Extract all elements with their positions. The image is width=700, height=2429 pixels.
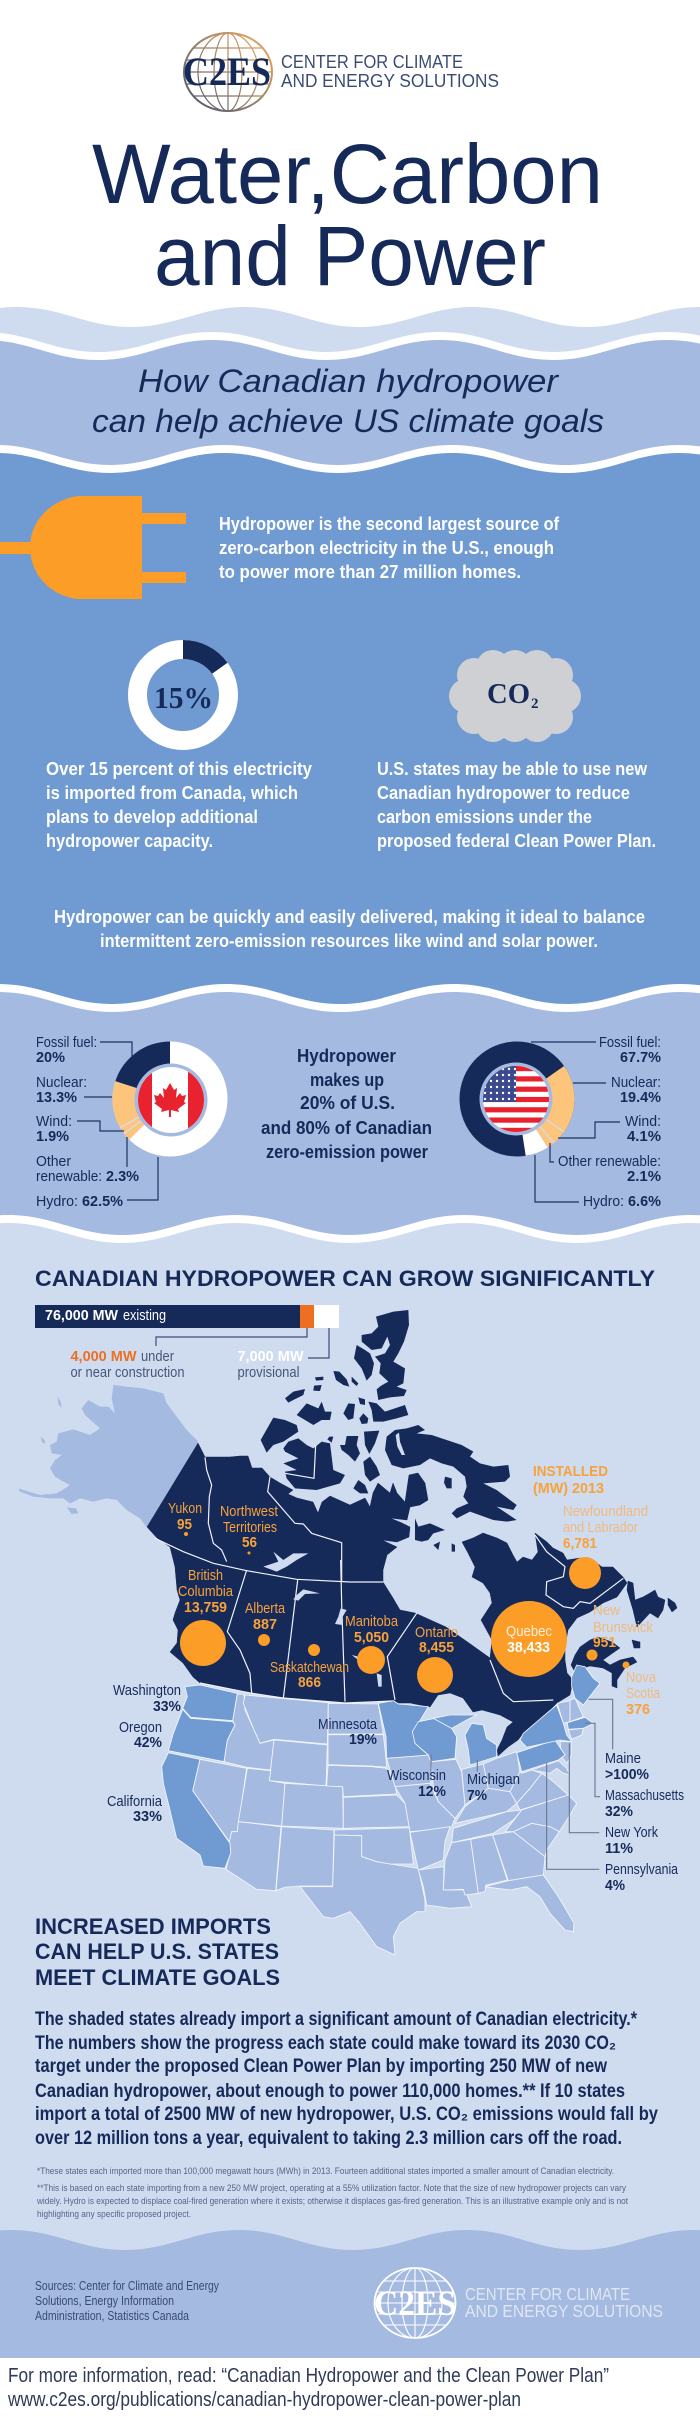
- text: clean power plan: [377, 759, 656, 851]
- label: Quebec: Quebec: [506, 1624, 552, 1640]
- subtitle: How Canadian hydropower: [138, 363, 559, 399]
- label: Newfoundland and Labrador: [563, 1504, 648, 1552]
- label: Maine: >100%: [605, 1767, 649, 1783]
- text: shaded states paragraph: [35, 2009, 658, 2149]
- text: more information: For more information, read: “Canadian Hydropower and the Clean Power Plan”: [8, 2365, 609, 2387]
- label: Yukon: 95: [177, 1517, 192, 1533]
- label: Pennsylvania: [605, 1862, 679, 1894]
- text: 15 percent imported: hydropower capacity.: [46, 831, 213, 851]
- label: Northwest Territories: [220, 1504, 278, 1551]
- label: installed heading: [533, 1463, 608, 1497]
- label: provisional: provisional: [238, 1364, 300, 1381]
- label: Nova Scotia: Nova: [626, 1670, 657, 1686]
- labels: Canada generation mix: Hydro:: [36, 1194, 78, 1210]
- text: clean power plan: U.S. states may be able to use new: [377, 759, 648, 779]
- title: Water,Carbon: [92, 127, 603, 221]
- text: hydropower share: and 80% of Canadian: [261, 1118, 432, 1138]
- text: footnotes: highlighting any specific proposed project.: [37, 2209, 191, 2220]
- label: New York: [605, 1825, 659, 1857]
- label: Ontario: [415, 1625, 458, 1656]
- logo name: CENTER FOR CLIMATE: [281, 52, 463, 72]
- heading: increased imports: [35, 1914, 280, 1990]
- label: Wisconsin: 12%: [418, 1784, 446, 1800]
- label: Quebec: 38,433: [507, 1640, 550, 1656]
- text: hydropower second largest source: to power more than 27 million homes.: [219, 562, 521, 582]
- label: Quebec: [506, 1624, 552, 1656]
- heading: increased imports: INCREASED IMPORTS: [35, 1914, 271, 1939]
- text: 15 percent imported: plans to develop additional: [46, 807, 258, 827]
- labels: US generation mix: 6.6%: [628, 1194, 661, 1210]
- text: clean power plan: carbon emissions under the: [377, 807, 592, 827]
- map: provincial borders and lakes: [155, 1445, 623, 1703]
- text: sources: Administration, Statistics Canada: [35, 2308, 190, 2323]
- icon: CO2 cloud: CO: [487, 679, 530, 710]
- labels: US generation mix: [531, 1035, 661, 1210]
- label: Massachusetts: 32%: [605, 1804, 633, 1820]
- map: US western states: [162, 1685, 425, 1955]
- label: Northwest Territories: Northwest: [220, 1504, 278, 1520]
- label: Nova Scotia: [626, 1670, 661, 1718]
- label: Manitoba: 5,050: [354, 1630, 389, 1646]
- label: Wisconsin: [387, 1768, 446, 1800]
- labels: Canada generation mix: 13.3%: [36, 1090, 77, 1106]
- label: Northwest Territories: 56: [242, 1535, 257, 1551]
- labels: Canada generation mix: Wind:: [36, 1114, 72, 1130]
- label: Saskatchewan: Saskatchewan: [270, 1660, 349, 1676]
- label: Minnesota: [318, 1717, 378, 1748]
- label: Pennsylvania: Pennsylvania: [605, 1862, 679, 1878]
- text: hydropower share: 20% of U.S.: [300, 1093, 395, 1113]
- text: footnotes: [36, 2166, 628, 2220]
- label: Northwest Territories: Territories: [223, 1520, 277, 1536]
- label: Newfoundland and Labrador: Newfoundland: [563, 1504, 648, 1520]
- label: New Brunswick: 951: [593, 1635, 616, 1651]
- label: British Columbia: 13,759: [184, 1600, 227, 1616]
- text: footnotes: **This is based on each state importing from a new 250 MW project, operating at a 55% utilization factor. Note that the size of new hydropower projects can vary: [37, 2183, 626, 2194]
- label: Newfoundland and Labrador: and Labrador: [563, 1520, 638, 1536]
- text: hydropower share: [261, 1046, 432, 1162]
- heading: Canadian hydropower can grow: CANADIAN HYDROPOWER CAN GROW SIGNIFICANTLY: [35, 1266, 655, 1291]
- logo name: AND ENERGY SOLUTIONS: [465, 2301, 663, 2321]
- footer logo: [374, 2268, 663, 2338]
- text: hydropower second largest source: Hydropower is the second largest source of: [219, 514, 560, 534]
- subtitle: [92, 363, 604, 439]
- label: Minnesota: 19%: [349, 1732, 377, 1748]
- logo name: AND ENERGY SOLUTIONS: [281, 71, 499, 91]
- label: Michigan: Michigan: [467, 1772, 520, 1788]
- label: British Columbia: Columbia: [178, 1584, 234, 1600]
- map: state labels: [107, 1683, 684, 1894]
- chart: US generation mix donut: [460, 1042, 575, 1156]
- label: provisional: [238, 1348, 304, 1381]
- text: clean power plan: proposed federal Clean Power Plan.: [377, 831, 656, 851]
- chart: 15 percent donut: 15%: [154, 680, 213, 715]
- label: California: [107, 1794, 163, 1825]
- chart: capacity stacked bar: existing: [123, 1307, 166, 1324]
- chart: capacity stacked bar: [35, 1305, 339, 1381]
- icon: Canadian flag: [138, 1067, 204, 1133]
- text: 15 percent imported: is imported from Canada, which: [46, 783, 298, 803]
- label: Manitoba: Manitoba: [345, 1614, 399, 1630]
- label: Ontario: 8,455: [419, 1640, 454, 1656]
- map: Canada mainland: [147, 1443, 627, 1756]
- text: hydropower share: Hydropower: [297, 1046, 396, 1066]
- label: installed heading: INSTALLED: [533, 1463, 608, 1480]
- text: shaded states paragraph: target under the proposed Clean Power Plan by importing 250 MW of new: [35, 2056, 607, 2077]
- labels: US generation mix: Hydro:: [583, 1194, 624, 1210]
- label: installed heading: (MW) 2013: [533, 1480, 604, 1497]
- labels: US generation mix: 4.1%: [627, 1129, 661, 1145]
- chart: Canada generation mix donut: [112, 1042, 228, 1156]
- labels: US generation mix: Wind:: [625, 1114, 661, 1130]
- label: New Brunswick: Brunswick: [593, 1620, 654, 1636]
- text: quickly delivered: intermittent zero-emission resources like wind and solar power.: [100, 931, 598, 951]
- label: British Columbia: [178, 1568, 234, 1616]
- map: Alaska: [18, 1385, 198, 1527]
- label: New York: New York: [605, 1825, 659, 1841]
- label: Massachusetts: [605, 1788, 684, 1820]
- label: Michigan: [467, 1772, 520, 1804]
- label: Maine: [605, 1751, 649, 1783]
- label: Massachusetts: Massachusetts: [605, 1788, 684, 1804]
- icon: globe: [184, 33, 272, 111]
- header logo: [183, 33, 499, 111]
- label: Oregon: [119, 1720, 162, 1751]
- label: Maine: Maine: [605, 1751, 641, 1767]
- label: under construction: under: [141, 1348, 174, 1365]
- label: Alberta: 887: [253, 1617, 277, 1633]
- text: 15 percent imported: [46, 759, 312, 851]
- chart: capacity stacked bar: 76,000 MW: [45, 1307, 119, 1324]
- label: Yukon: [168, 1501, 202, 1533]
- label: Newfoundland and Labrador: 6,781: [563, 1536, 597, 1552]
- icon: US flag: [482, 1065, 550, 1135]
- label: Washington: 33%: [153, 1699, 181, 1715]
- text: hydropower second largest source: [219, 514, 560, 582]
- text: sources: [35, 2278, 219, 2323]
- label: Alberta: [245, 1601, 286, 1633]
- label: Nova Scotia: 376: [626, 1702, 650, 1718]
- logo name: CENTER FOR CLIMATE: [465, 2284, 630, 2304]
- label: New York: 11%: [605, 1841, 633, 1857]
- text: footnotes: *These states each imported more than 100,000 megawatt hours (MWh) in 2013. Fourteen additional states imported a smaller amount of Canadian electricity.: [37, 2166, 614, 2177]
- icon: white globe: [374, 2268, 456, 2338]
- label: Oregon: Oregon: [119, 1720, 162, 1736]
- logo mark text: C2ES: [374, 2283, 456, 2323]
- label: Washington: Washington: [113, 1683, 181, 1699]
- logo name: [281, 52, 499, 91]
- labels: Canada generation mix: Fossil fuel:: [36, 1035, 97, 1051]
- label: under construction: or near construction: [70, 1364, 184, 1381]
- label: Minnesota: Minnesota: [318, 1717, 378, 1733]
- label: Alberta: Alberta: [245, 1601, 286, 1617]
- heading: increased imports: MEET CLIMATE GOALS: [35, 1965, 280, 1990]
- text: shaded states paragraph: Canadian hydropower, about enough to power 110,000 homes.** If 10 states: [35, 2081, 625, 2102]
- subtitle: can help achieve US climate goals: [92, 403, 604, 439]
- label: Yukon: Yukon: [168, 1501, 202, 1517]
- label: under construction: [70, 1348, 184, 1381]
- icon: electric plug: [0, 496, 186, 599]
- map: installed capacity circles: [180, 1532, 630, 1693]
- text: hydropower share: zero-emission power: [266, 1142, 428, 1162]
- map: Baffin and Hudson Bay islands: [385, 1425, 517, 1552]
- label: California: 33%: [133, 1809, 162, 1825]
- title: [92, 127, 603, 303]
- label: Ontario: Ontario: [415, 1625, 458, 1641]
- map: US eastern states: [378, 1665, 600, 1932]
- map: province labels: [168, 1463, 661, 1718]
- labels: Canada generation mix: 2.3%: [106, 1169, 139, 1185]
- label: Washington: [113, 1683, 181, 1715]
- label: California: California: [107, 1794, 163, 1810]
- labels: US generation mix: 19.4%: [620, 1090, 661, 1106]
- text: quickly delivered: Hydropower can be quickly and easily delivered, making it ideal to balance: [54, 907, 645, 927]
- map: Maritime provinces: [571, 1581, 677, 1688]
- label: under construction: 4,000 MW: [70, 1348, 137, 1365]
- label: Oregon: 42%: [134, 1735, 162, 1751]
- labels: US generation mix: Nuclear:: [611, 1075, 661, 1091]
- labels: US generation mix: Fossil fuel:: [599, 1035, 661, 1051]
- labels: Canada generation mix: Nuclear:: [36, 1075, 87, 1091]
- labels: US generation mix: 67.7%: [620, 1050, 661, 1066]
- label: New Brunswick: New: [593, 1603, 620, 1619]
- text: more information: [7, 2365, 609, 2411]
- label: Wisconsin: Wisconsin: [387, 1768, 446, 1784]
- map: state leader lines: [431, 1699, 613, 1869]
- labels: US generation mix: 2.1%: [627, 1169, 661, 1185]
- label: Manitoba: [345, 1614, 399, 1646]
- heading: increased imports: CAN HELP U.S. STATES: [35, 1939, 279, 1964]
- label: Saskatchewan: [270, 1660, 349, 1691]
- labels: Canada generation mix: [36, 1035, 158, 1210]
- text: sources: Sources: Center for Climate and Energy: [35, 2278, 219, 2293]
- label: provisional: 7,000 MW: [238, 1348, 304, 1365]
- label: Saskatchewan: 866: [298, 1675, 321, 1691]
- labels: US generation mix: Other renewable:: [558, 1154, 661, 1170]
- logo mark text: C2ES: [183, 49, 271, 94]
- label: Michigan: 7%: [467, 1788, 487, 1804]
- label: New Brunswick: [593, 1603, 654, 1651]
- text: hydropower second largest source: zero-carbon electricity in the U.S., enough: [219, 538, 554, 558]
- map: Arctic archipelago: [261, 1310, 409, 1493]
- labels: Canada generation mix: renewable:: [36, 1169, 102, 1185]
- label: Nova Scotia: Scotia: [626, 1686, 661, 1702]
- map: North America: [18, 1310, 684, 1955]
- logo name: [465, 2284, 663, 2321]
- label: Pennsylvania: 4%: [605, 1878, 625, 1894]
- text: shaded states paragraph: over 12 million tons a year, equivalent to taking 2.3 million cars off the road.: [35, 2128, 622, 2149]
- text: clean power plan: Canadian hydropower to reduce: [377, 783, 630, 803]
- text: 15 percent imported: Over 15 percent of this electricity: [46, 759, 312, 779]
- labels: Canada generation mix: 1.9%: [36, 1129, 69, 1145]
- chart: 15 percent donut: [138, 640, 228, 740]
- icon: CO2 cloud: 2: [531, 696, 538, 712]
- text: sources: Solutions, Energy Information: [35, 2293, 174, 2308]
- text: more information: www.c2es.org/publications/canadian-hydropower-clean-power-plan: [7, 2389, 521, 2411]
- labels: Canada generation mix: 62.5%: [82, 1194, 123, 1210]
- text: footnotes: widely. Hydro is expected to displace coal-fired generation where it exists; otherwise it displaces gas-fired generation. This is an illustrative example only and is not: [36, 2196, 628, 2207]
- text: hydropower share: makes up: [310, 1070, 384, 1090]
- text: quickly delivered: [54, 907, 645, 951]
- title: and Power: [154, 209, 546, 303]
- label: British Columbia: British: [188, 1568, 223, 1584]
- labels: Canada generation mix: 20%: [36, 1050, 65, 1066]
- labels: Canada generation mix: Other: [36, 1154, 71, 1170]
- icon: CO2 cloud: [449, 650, 581, 742]
